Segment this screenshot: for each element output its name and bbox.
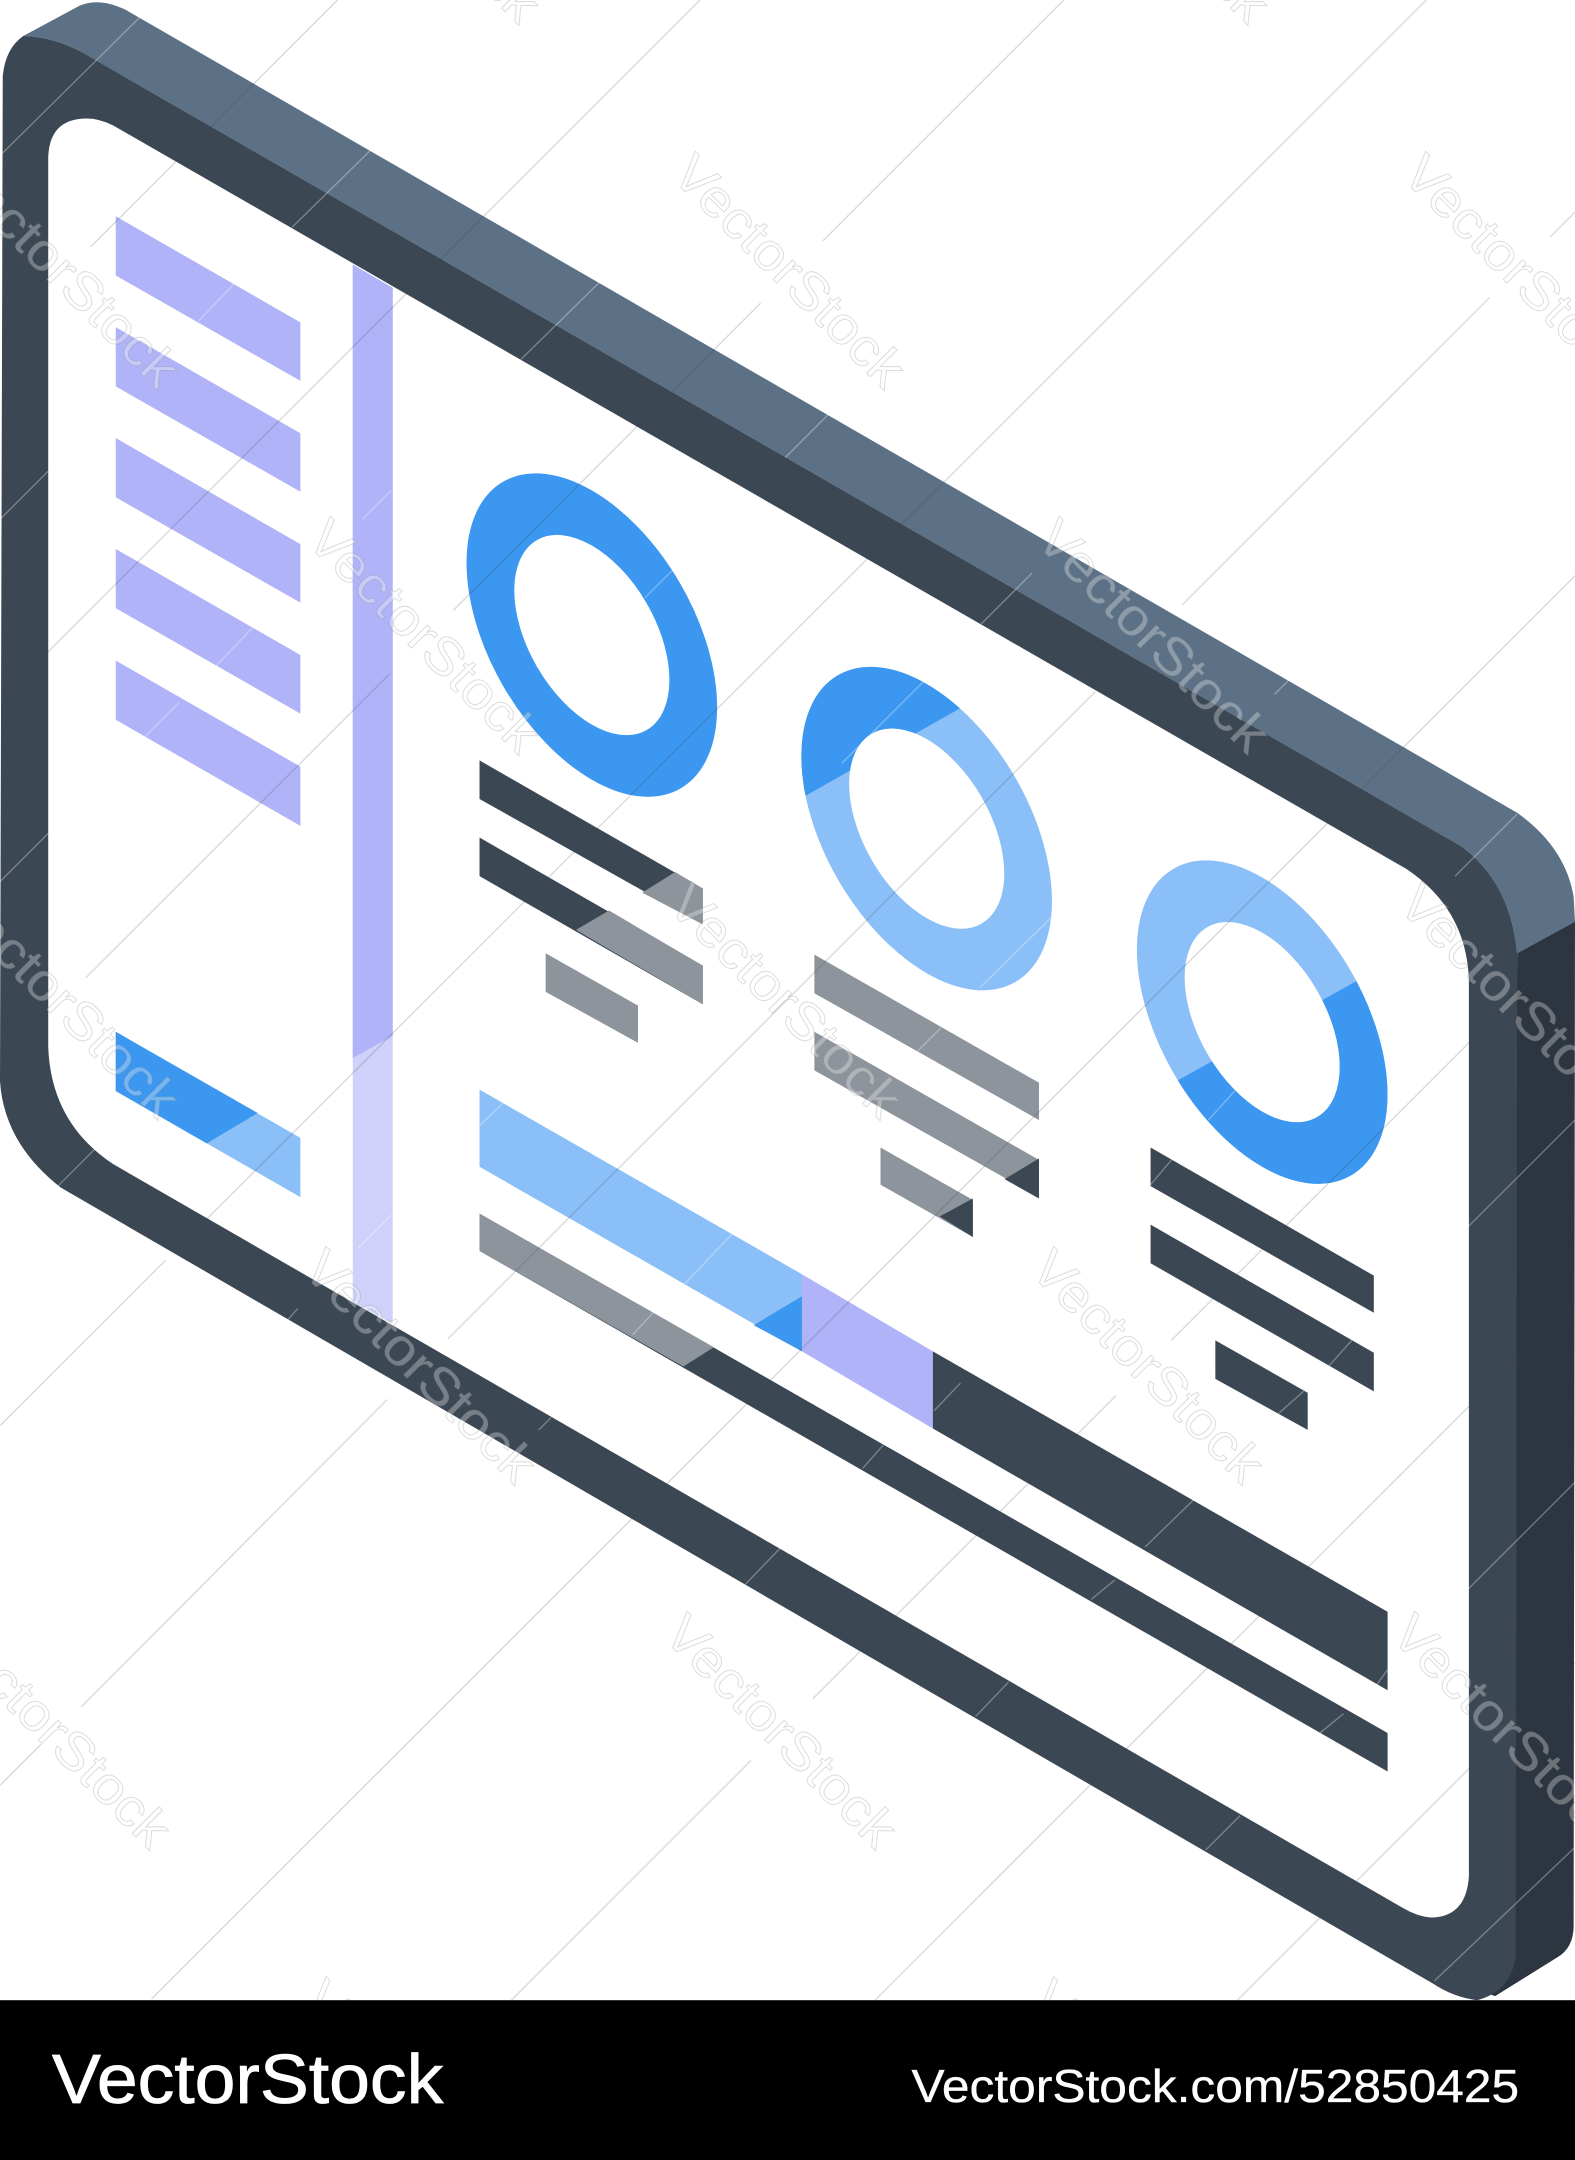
tablet right edge xyxy=(1461,922,1575,1996)
footer brand: VectorStock xyxy=(52,2040,444,2118)
text lines under donut 1 xyxy=(480,760,703,1043)
footer image id: VectorStock.com/52850425 xyxy=(912,2060,1519,2112)
footer bar xyxy=(0,2000,1575,2160)
donut chart 2 xyxy=(825,653,1028,1004)
watermark pattern: VectorStock xyxy=(296,509,552,765)
watermark pattern: VectorStock xyxy=(292,1239,548,1495)
text lines under donut 3 xyxy=(1151,1148,1374,1430)
watermark pattern: VectorStock xyxy=(653,1604,909,1860)
thin progress bar xyxy=(480,1214,1388,1772)
donut chart 3 xyxy=(1161,847,1364,1198)
text lines under donut 2 xyxy=(814,955,1039,1237)
watermark pattern: VectorStock xyxy=(1019,1239,1275,1495)
watermark pattern: VectorStock xyxy=(1025,509,1281,765)
vertical scrollbar xyxy=(353,264,393,1324)
sidebar menu lines xyxy=(116,216,300,826)
donut chart 1 xyxy=(490,459,693,811)
tablet screen xyxy=(48,118,1469,1918)
sidebar bottom button xyxy=(116,1032,300,1197)
tablet top edge xyxy=(23,2,1575,953)
watermark pattern: VectorStock xyxy=(661,144,917,400)
wide stacked bar xyxy=(480,1090,1388,1690)
watermark pattern: VectorStock xyxy=(657,874,913,1130)
